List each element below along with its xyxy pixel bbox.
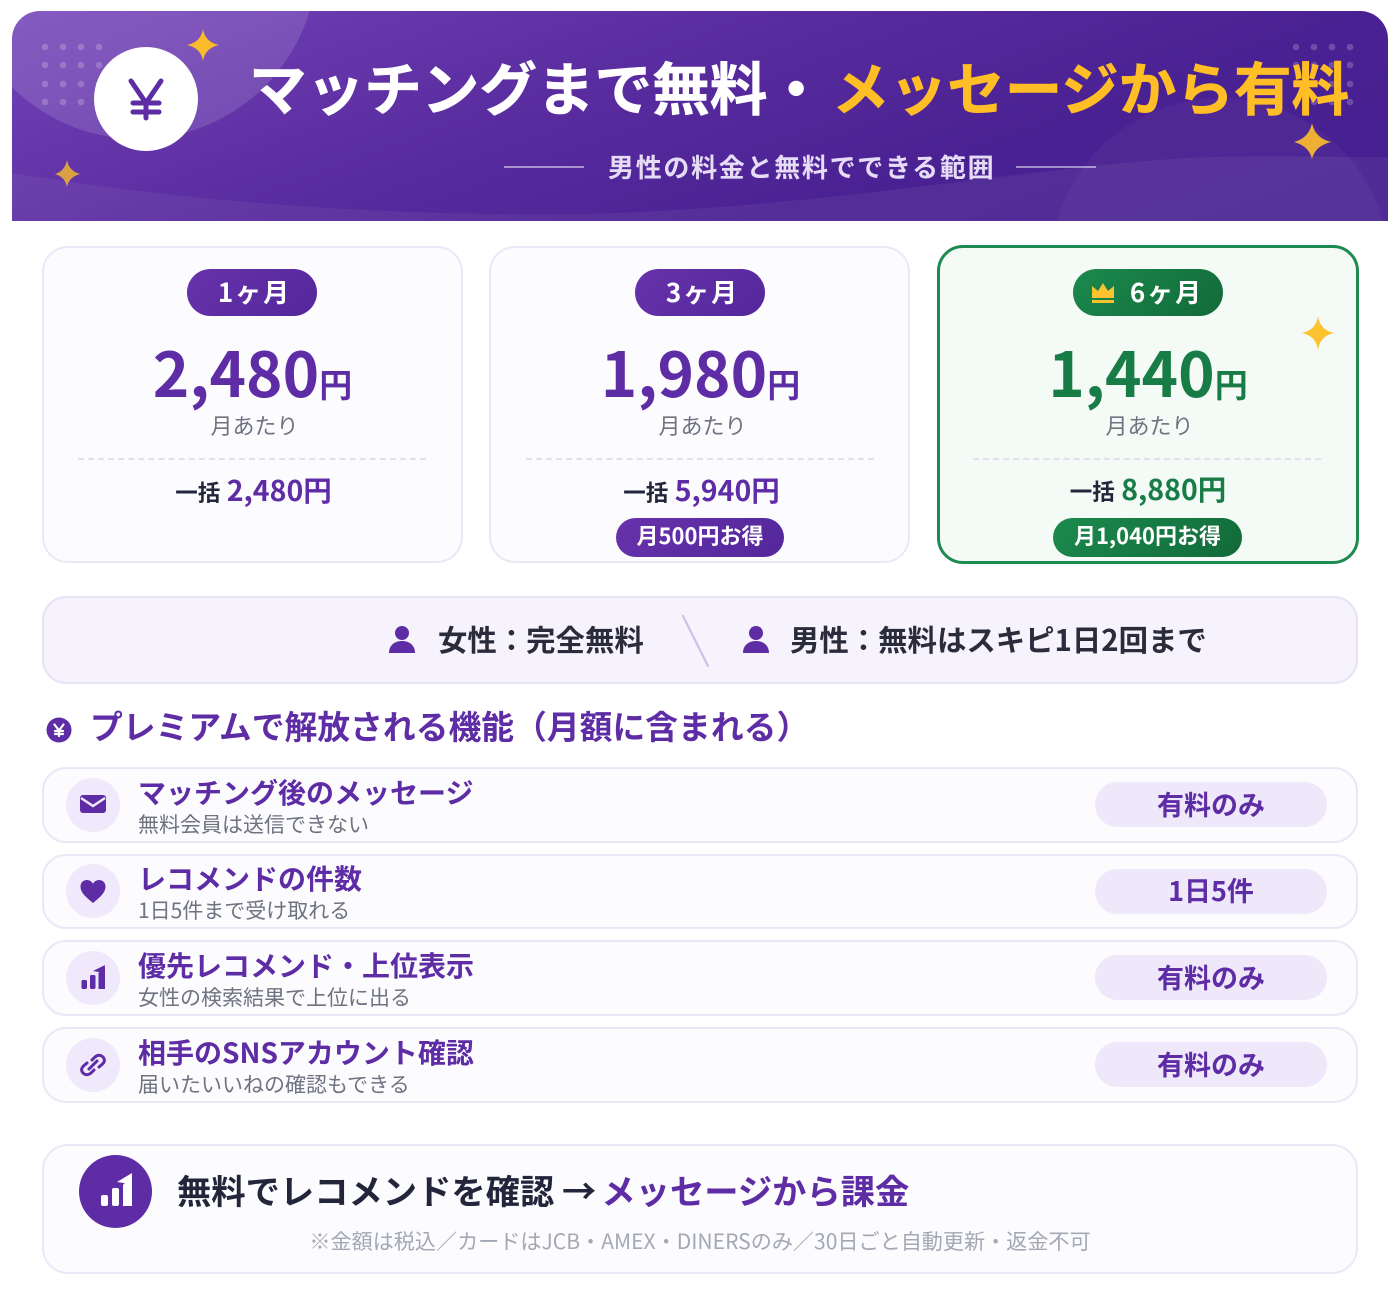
panel: 6 month plan	[937, 245, 1359, 564]
row: recommendations	[42, 854, 1358, 929]
male label: 男性：無料はスキピ1日2回まで	[790, 618, 1207, 660]
feature description: 女性の検索結果で上位に出る	[138, 982, 411, 1012]
dashed divider	[526, 458, 874, 460]
plan pill	[187, 269, 317, 316]
icon: envelope	[66, 778, 120, 832]
per month label: 月あたり	[658, 409, 746, 441]
savings badge: 月1,040円お得	[1074, 519, 1221, 551]
per month label: 月あたり	[210, 409, 298, 441]
status pill	[1095, 1042, 1327, 1087]
summary text: 無料でレコメンドを確認 →メッセージから課金	[177, 1164, 909, 1214]
subtitle: 男性の料金と無料でできる範囲	[608, 148, 995, 185]
icon: rising bars	[66, 951, 120, 1005]
price: 1,980円	[601, 325, 800, 415]
price: 2,480円	[153, 325, 352, 415]
feature description: 届いたいいねの確認もできる	[138, 1069, 410, 1099]
icon: yen coin	[94, 47, 198, 151]
row: SNS check	[42, 1027, 1358, 1103]
feature title: マッチング後のメッセージ	[138, 772, 473, 812]
status pill: 有料のみ	[1157, 1044, 1265, 1083]
title: マッチングまで無料・メッセージから有料	[249, 43, 1349, 127]
lump sum: 一括 2,480円	[175, 469, 332, 510]
panel: footer summary	[42, 1144, 1358, 1274]
status pill: 有料のみ	[1157, 784, 1265, 823]
feature title: 優先レコメンド・上位表示	[138, 945, 474, 985]
section heading: premium features	[46, 702, 809, 749]
status pill: 1日5件	[1168, 870, 1254, 909]
plan pill: 6ヶ月	[1130, 273, 1203, 310]
plan pill: 1ヶ月	[218, 273, 291, 310]
icon: rising bars circle	[79, 1155, 152, 1228]
status pill	[1095, 869, 1327, 914]
female label: 女性：完全無料	[438, 618, 644, 660]
feature description: 無料会員は送信できない	[138, 809, 369, 839]
feature title: レコメンドの件数	[138, 858, 362, 898]
icon: person male	[743, 626, 769, 653]
icon: person female	[389, 626, 415, 653]
dashed divider	[78, 458, 426, 460]
icon: sparkle	[1302, 316, 1334, 350]
fine print: ※金額は税込／カードはJCB・AMEX・DINERSのみ／30日ごと自動更新・返金不可	[309, 1226, 1091, 1256]
icon: link	[66, 1038, 120, 1092]
status pill	[1095, 955, 1327, 1000]
heading text: プレミアムで解放される機能（月額に含まれる）	[90, 702, 809, 749]
feature title: 相手のSNSアカウント確認	[138, 1032, 474, 1072]
plan pill: 3ヶ月	[666, 273, 739, 310]
panel: 1 month plan	[42, 246, 463, 563]
row: priority recommendation	[42, 940, 1358, 1016]
header banner	[12, 11, 1388, 221]
row: messaging	[42, 767, 1358, 843]
status pill	[1095, 782, 1327, 827]
plan pill	[635, 269, 765, 316]
icon: crown	[1092, 283, 1114, 303]
icon: yen badge	[46, 718, 72, 742]
feature description: 1日5件まで受け取れる	[138, 895, 350, 925]
panel: 3 month plan	[489, 246, 910, 563]
icon: heart	[66, 864, 120, 918]
price: 1,440円	[1048, 325, 1248, 415]
dashed divider	[973, 458, 1321, 460]
savings badge	[1053, 518, 1242, 557]
plan pill	[1073, 269, 1223, 316]
lump sum: 一括 8,880円	[1070, 468, 1226, 509]
savings badge: 月500円お得	[637, 519, 763, 551]
savings badge	[616, 518, 784, 557]
status pill: 有料のみ	[1157, 957, 1265, 996]
lump sum: 一括 5,940円	[623, 469, 780, 510]
panel: gender pricing bar	[42, 596, 1358, 684]
per month label: 月あたり	[1105, 409, 1194, 441]
subtitle rules	[504, 166, 1096, 168]
slash divider	[682, 614, 710, 667]
icon: sparkles in header	[55, 29, 1331, 187]
